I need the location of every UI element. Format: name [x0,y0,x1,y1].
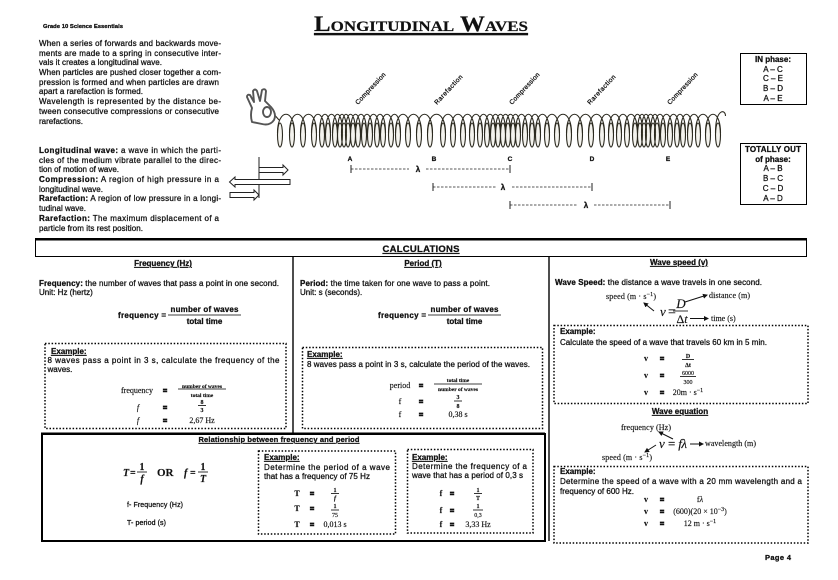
wavelength markers: λ [416,165,421,174]
panel: wave equation example: v [644,507,648,516]
panel: frequency from period example: 1 [476,488,480,494]
formula: wave speed with labels: Δt [676,312,688,326]
text block: introduction: ments are made to a spring in consecutive inter- [39,49,221,58]
formula: T and f relationship: f [140,474,145,485]
panel: frequency from period example: 1 [476,504,480,510]
panel: totally out of phase: TOTALLY OUT [745,145,801,154]
formula: period: frequency = [378,311,426,320]
formula: wave equation with labels: −1 [643,453,649,459]
formula: wave speed with labels: −1 [647,292,653,298]
panel: wave speed [554,258,808,404]
panel: period example [302,348,542,428]
formula: T and f relationship: 1 [140,462,144,473]
panel: totally out of phase [740,144,806,204]
panel: period: Unit: s (seconds). [300,288,362,297]
formula: period: number of waves [430,305,499,314]
legend: symbols: T- period (s) [127,520,166,527]
panel: period from frequency example: T [294,489,300,498]
panel: frequency example: waves. [46,365,72,374]
panel: period example: Example: [307,350,343,359]
panel: in phase: A – E [763,94,783,103]
panel: period from frequency example: 1 [334,488,336,494]
panel: period example: = [419,399,423,406]
formula: period: total time [447,317,483,326]
point labels A to E: D [590,156,595,163]
point labels A to E: C [508,156,513,163]
panel: period from frequency example: 0,013 s [323,520,347,529]
wavelength markers [351,165,670,210]
legend: symbols [127,502,183,527]
formula: T and f relationship: OR [157,467,175,479]
panel: totally out of phase: A – D [763,194,783,203]
panel: wave equation example: −1 [710,519,716,525]
panel: wave speed example: 300 [684,380,692,386]
text block: definitions: Rarefaction: A region of low pressure in a longi- [39,194,221,203]
panel: period example: period [390,381,410,390]
formula: wave speed with labels: = [668,305,676,320]
wavelength markers: λ [584,201,589,210]
panel: period [300,259,542,428]
panel: period from frequency example: 1 [334,504,336,510]
formula: T and f relationship: T [200,474,207,485]
panel: period from frequency example: = [310,506,314,513]
formula: wave speed with labels [606,291,750,326]
arrows: particle vibration directions [230,157,290,200]
panel: totally out of phase: C – D [763,184,783,193]
text block: introduction: When particles are pushed closer together a com- [39,68,221,77]
panel: period from frequency example: Example: [264,453,300,462]
formula: T and f relationship: f [184,468,189,479]
formula: frequency: number of waves [170,305,239,314]
panel: period example: f [399,410,402,419]
formula: T and f relationship: T [123,468,130,479]
panel: period: Period: the time taken for one wave to pass a point. [300,279,490,288]
panel: period example: number of waves [438,387,478,393]
panel: wave speed example: Example: [560,327,596,336]
panel: frequency example: = [163,405,167,412]
panel: in phase: IN phase: [755,55,791,64]
formula: wave equation with labels: speed (m · s [602,453,643,462]
panel: in phase [740,54,806,104]
panel: wave equation example: frequency of 600 Hz. [560,487,634,496]
panel: frequency example: 3 [200,408,204,414]
panel: wave speed example: = [660,373,664,380]
formula: wave equation with labels: wavelength (m) [705,439,756,448]
text block: introduction: rarefactions. [39,117,83,126]
panel: period from frequency example: T [294,504,300,513]
formula: frequency: frequency = [118,311,166,320]
panel: wave speed example [554,326,808,404]
panel: wave speed example: −1 [697,388,703,394]
point labels A to E: E [666,156,671,163]
panel: wave speed example: v [644,354,648,363]
panel: period example: total time [447,378,470,384]
text block: introduction: vals it creates a longitudinal wave. [39,58,162,67]
panel: frequency from period example: Example: [412,453,448,462]
panel: in phase: B – D [763,84,783,93]
panel: period example: 0,38 s [448,410,468,419]
formula: T and f relationship: = [190,468,196,479]
formula: wave speed with labels: speed (m · s [606,292,647,301]
panel: wave equation example: v [644,519,648,528]
formula: wave speed with labels: D [675,296,686,311]
title: Longitudinal Waves [314,11,528,36]
panel: frequency: Frequency: the number of waves that pass a point in one second. [39,279,279,288]
panel: wave speed example: = [660,390,664,397]
panel: frequency [39,259,286,428]
panel: period: Period (T) [404,259,442,268]
panel: frequency from period example: f [440,506,443,515]
formula: wave speed with labels: ) [653,292,656,301]
spring labels: compression and rarefaction [354,71,700,106]
formula: wave equation with labels [602,423,756,462]
point labels A to E: B [432,156,437,163]
panel: frequency example: 8 [200,400,204,406]
panel: wave equation [554,407,808,543]
panel: wave speed example: D [686,354,691,360]
calculations header [35,238,807,256]
panel: period from frequency example [258,451,396,534]
panel: frequency example: total time [191,393,214,399]
text block: definitions: Longitudinal wave: a wave in which the parti- [39,146,221,155]
panel: totally out of phase: B – C [763,174,783,183]
spring labels: compression and rarefaction: Compression [354,71,388,106]
text block: definitions: Rarefaction: The maximum displacement of a [39,214,220,223]
panel: frequency from period example: f [440,520,443,529]
panel: wave equation example: (600)(20 × 10 [673,507,718,516]
text block: introduction: tween consecutive compressions or consecutive [39,107,220,116]
panel: totally out of phase: of phase: [755,155,791,164]
panel: totally out of phase: A – B [763,164,783,173]
panel: frequency example: = [163,418,167,425]
panel: wave speed: Wave speed (v) [650,258,708,267]
panel: frequency example: f [137,416,141,425]
spring labels: compression and rarefaction: Rarefaction [586,74,618,106]
panel: wave equation example: ) [724,507,727,516]
panel: period from frequency example: 75 [332,513,338,519]
panel: frequency example: f [137,403,141,412]
panel: period example: = [419,412,423,419]
panel: frequency from period example: = [450,508,454,515]
point labels A to E [348,156,671,163]
panel: frequency from period example: wave that has a period of 0,3 s [411,471,523,480]
panel: wave equation example: fλ [697,495,704,504]
panel: wave speed example: 20m · s [673,388,697,397]
text block: definitions [39,146,221,233]
panel: frequency example: number of waves [182,384,222,390]
panel: frequency from period example: 0,3 [474,513,482,519]
panel: frequency example: Example: [51,347,87,356]
panel: period example: 8 [456,404,460,410]
panel: wave equation example: = [660,497,664,504]
column dividers [293,257,549,541]
formula: wave equation with labels: v = fλ [659,436,687,451]
formula: frequency: total time [187,317,223,326]
page number: Page 4 [765,553,792,562]
text block: definitions: tion of motion of wave. [39,165,119,174]
panel: frequency example: 2,67 Hz [189,416,215,425]
text block: introduction: pression is formed and when particles are drawn [39,78,219,87]
panel: period from frequency example: Determine the period of a wave [264,463,391,472]
formula: frequency [118,305,241,326]
panel: period example: 3 [456,395,460,401]
panel: wave speed example: = [660,356,664,363]
panel: frequency: Unit: Hz (hertz) [39,288,93,297]
panel: frequency example: 8 waves pass a point in 3 s, calculate the frequency of the [48,356,280,365]
panel: frequency from period example [408,450,533,533]
text block: definitions: particle from its rest position. [39,224,143,233]
wavelength markers: λ [501,183,506,192]
panel: wave speed: Wave Speed: the distance a wave travels in one second. [555,278,762,287]
panel: frequency from period example: 3,33 Hz [465,520,491,529]
text block: introduction: Wavelength is represented by the distance be- [39,97,221,106]
bottom rule of columns [41,432,545,434]
formula: wave speed with labels: v [660,304,666,319]
panel: wave speed example: v [644,371,648,380]
panel: frequency example [45,344,286,428]
panel: period example: 8 waves pass a point in 3 s, calculate the period of the waves. [307,360,530,369]
panel: frequency from period example: = [450,491,454,498]
text block: introduction: apart a rarefaction is formed. [39,87,143,96]
icon: hand holding spring [247,89,275,124]
panel: period from frequency example: f [334,496,337,502]
formula: T and f relationship: = [130,468,136,479]
panel: wave equation example: Example: [560,467,596,476]
panel: frequency from period example: f [440,489,443,498]
panel: wave speed example: Δt [685,363,691,369]
spring labels: compression and rarefaction: Rarefaction [433,74,465,106]
formula: wave speed with labels: distance (m) [709,291,750,300]
panel: period from frequency example: = [310,522,314,529]
panel: wave equation example: Determine the speed of a wave with a 20 mm wavelength and a [560,477,803,486]
text block: definitions: tudinal wave. [39,204,86,213]
spring labels: compression and rarefaction: Compression [508,71,542,106]
panel: wave equation: Wave equation [652,407,708,416]
panel: wave speed example: Calculate the speed of a wave that travels 60 km in 5 min. [560,338,767,347]
panel: frequency from period example: Determine the frequency of a [412,462,528,471]
calculations header: CALCULATIONS [382,244,460,255]
spring diagram [272,112,726,147]
text block: definitions: cles of the medium vibrate parallel to the direc- [39,156,221,165]
header label: Grade 10 Science Essentials: Grade 10 Science Essentials [43,24,124,30]
panel: relationship between frequency and period [42,434,545,541]
panel: frequency from period example: T [476,496,480,502]
spring labels: compression and rarefaction: Compression [666,71,700,106]
panel: frequency from period example: = [450,522,454,529]
panel: frequency example: = [163,388,167,395]
panel: relationship between frequency and period: Relationship between frequency and period [198,435,360,444]
text block: introduction: When a series of forwards and backwards move- [39,39,221,48]
panel: in phase: A – C [763,65,783,74]
text block: definitions: Compression: A region of high pressure in a [39,175,220,184]
formula: wave equation with labels: frequency (Hz) [621,423,671,432]
text block: introduction [39,39,221,126]
panel: period from frequency example: that has a frequency of 75 Hz [264,472,370,481]
panel: period example: f [399,397,402,406]
panel: wave equation example: 12 m · s [684,519,710,528]
formula: period [378,305,501,326]
legend: symbols: f- Frequency (Hz) [127,502,183,509]
panel: wave equation example [554,466,808,543]
formula: T and f relationship [123,462,208,485]
panel: frequency: Frequency (Hz) [134,259,192,268]
panel: wave speed example: 6000 [682,371,694,377]
panel: period example: = [419,383,423,390]
panel: wave equation example: = [660,509,664,516]
panel: wave equation example: v [644,495,648,504]
panel: frequency example: frequency [121,386,153,395]
panel: period from frequency example: T [294,520,300,529]
formula: wave equation with labels: ) [649,453,652,462]
panel: period from frequency example: = [310,491,314,498]
panel: wave equation example: = [660,521,664,528]
panel: in phase: C – E [763,74,783,83]
formula: wave speed with labels: time (s) [711,314,736,323]
formula: T and f relationship: 1 [200,462,206,473]
text block: definitions: longitudinal wave. [39,185,103,194]
panel: wave speed example: v [644,388,648,397]
point labels A to E: A [348,156,353,163]
panel: wave equation example: −3 [718,507,724,513]
